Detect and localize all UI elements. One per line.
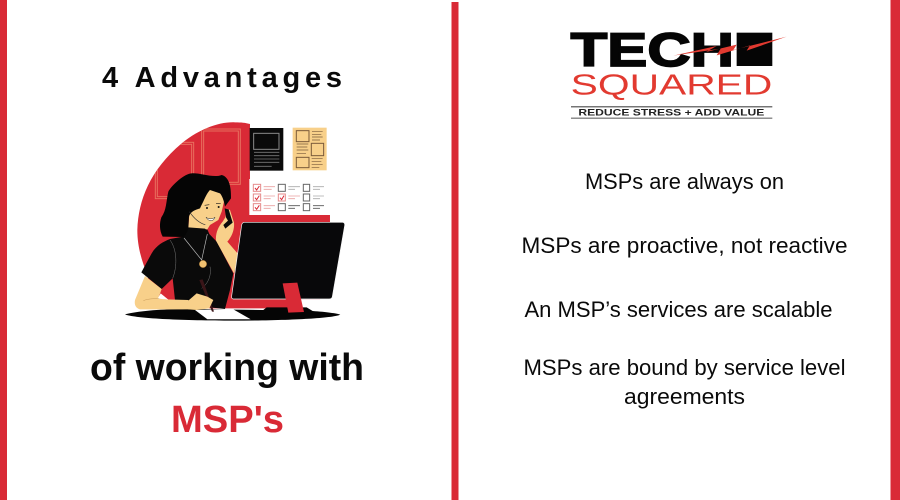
- logo: Tech Squared: [571, 24, 787, 119]
- logo black square: [737, 33, 772, 66]
- logo wordmark SQUARED: SQUARED: [571, 70, 772, 102]
- center divider bar: [452, 2, 458, 500]
- woman's hair: [160, 173, 231, 237]
- advantage 1: MSPs are always on: [585, 169, 784, 194]
- necklace: [184, 234, 207, 268]
- computer monitor: [232, 222, 345, 299]
- right border bar: [890, 0, 900, 500]
- red background blob: [137, 122, 330, 308]
- heading: MSP's: MSP's: [171, 399, 284, 441]
- wall frames: [155, 129, 240, 199]
- left border bar: [0, 0, 7, 500]
- advantage 4: [524, 355, 846, 409]
- heading: of working with: of working with: [90, 347, 364, 389]
- woman's hand and phone: [216, 208, 239, 273]
- desk shadow: [125, 307, 340, 321]
- heading: 4 Advantages: 4 Advantages: [102, 62, 342, 94]
- tan notes poster: [293, 128, 327, 170]
- logo lightning bolt: [673, 37, 787, 56]
- turtleneck collar: [183, 227, 209, 238]
- black poster: [250, 128, 283, 171]
- monitor stand: [283, 283, 304, 313]
- woman's neck and face: [188, 187, 224, 229]
- pen: [199, 279, 214, 312]
- sweater seams: [170, 240, 210, 288]
- paper: [195, 309, 251, 319]
- logo wordmark TECH: TECH: [571, 24, 734, 77]
- advantage 3: An MSP’s services are scalable: [524, 297, 832, 322]
- advantage 4: MSPs are bound by service level: [524, 355, 846, 380]
- woman's face details: [189, 203, 221, 225]
- advantage 4: agreements: [624, 384, 745, 409]
- checklist panel: [249, 179, 329, 215]
- logo tagline: REDUCE STRESS + ADD VALUE: [578, 108, 764, 118]
- advantage 2: MSPs are proactive, not reactive: [522, 233, 848, 258]
- woman's arm: [135, 276, 190, 309]
- woman's torso: [141, 228, 233, 309]
- illustration: woman on phone at computer: [125, 122, 345, 321]
- writing hand: [188, 293, 213, 310]
